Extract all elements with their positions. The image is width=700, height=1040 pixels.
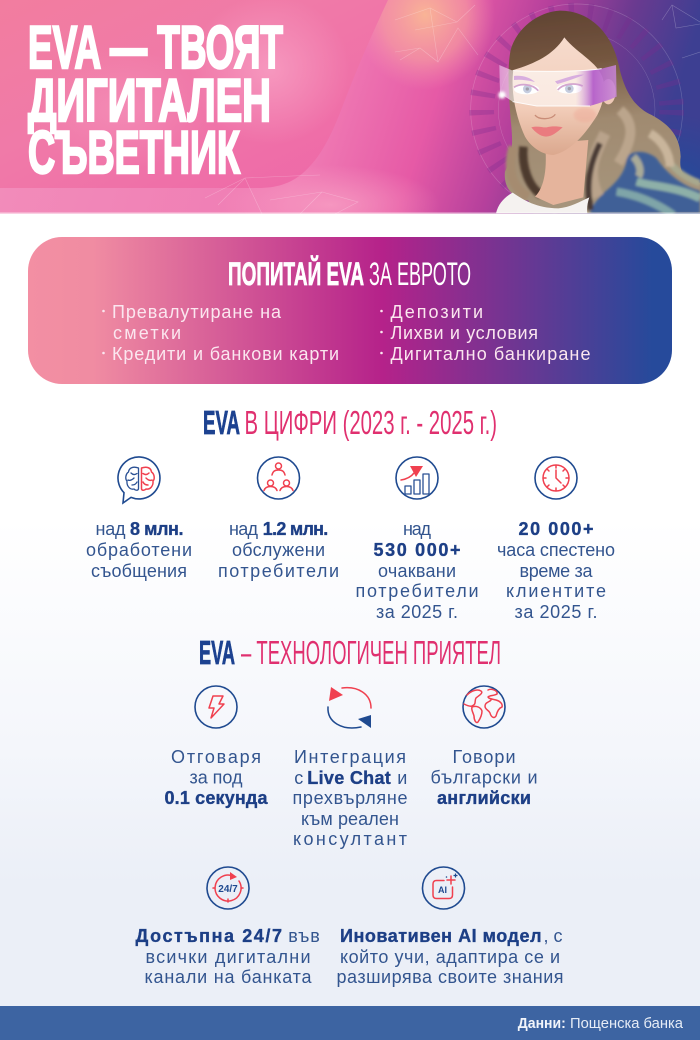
stat text (356, 519, 478, 622)
feature text (164, 747, 268, 808)
eye makeup and eyes (514, 75, 584, 94)
header title: СЪВЕТНИК (28, 119, 240, 186)
feature text: Live Chat (307, 768, 391, 788)
feature text: английски (437, 788, 531, 808)
icon: 24/7: 24/7 (218, 884, 238, 895)
stat text (218, 519, 339, 581)
lips (531, 126, 563, 137)
list: left column: Превалутиране на (112, 302, 282, 322)
list: right column: Лихви и условия (390, 323, 538, 343)
feature text: за под (190, 768, 243, 788)
icon: lightning (195, 686, 237, 728)
footer: data source: Данни: (518, 1016, 566, 1032)
feature text: , с (544, 926, 563, 946)
feature text: Отговаря (171, 747, 261, 767)
feature text (136, 926, 320, 987)
feature: live chat integration (292, 687, 408, 849)
icon: 24/7 (207, 867, 249, 909)
feature: response speed (164, 686, 268, 808)
face (513, 37, 604, 155)
stat text: потребители (356, 581, 478, 601)
feature text (336, 926, 564, 987)
header title: EVA — ТВОЯТ (28, 14, 283, 81)
list: left column: сметки (113, 323, 181, 343)
panel: ask EVA about the euro (28, 237, 672, 384)
feature: AI model (336, 867, 564, 987)
icon: AI chip (422, 867, 464, 909)
panel heading: ЗА ЕВРОТО (369, 256, 471, 292)
radial technology rings (471, 4, 683, 216)
footer: data source: Пощенска банка (570, 1016, 684, 1032)
feature: availability (136, 867, 320, 987)
header title: ДИГИТАЛЕН (28, 67, 271, 134)
feature text: към реален (301, 809, 399, 829)
stat text: 8 млн. (130, 519, 184, 539)
stat text (86, 519, 192, 581)
feature text: който учи, адаптира се и (340, 947, 560, 967)
feature text: във (288, 926, 320, 946)
stat: expected users (356, 457, 478, 622)
feature text: с (294, 768, 303, 788)
icon: brain speech bubble (118, 457, 160, 503)
feature text: Интеграция (294, 747, 406, 767)
footer: data source (0, 1006, 700, 1040)
neck and shirt (535, 140, 588, 205)
stat text: потребители (218, 561, 339, 581)
heading: EVA in numbers: В ЦИФРИ (2023 г. - 2025 г.) (244, 404, 497, 441)
portrait of EVA (496, 11, 700, 215)
ear (603, 79, 616, 104)
feature text (430, 747, 538, 808)
stat text: обработени (86, 540, 192, 560)
feature text: 0.1 секунда (164, 788, 268, 808)
stat: users served (218, 457, 339, 581)
icon: clock (535, 457, 577, 499)
heading: EVA technological friend (199, 634, 501, 671)
list: right column (380, 302, 590, 364)
heading: EVA technological friend: – ТЕХНОЛОГИЧЕН ПРИЯТЕЛ (241, 634, 501, 671)
heading: EVA in numbers (203, 404, 497, 441)
stat text: 1.2 млн. (263, 519, 328, 539)
icon: globe (463, 686, 505, 728)
stat text: обслужени (232, 540, 325, 560)
feature: languages (430, 686, 538, 808)
blue hair ends (510, 110, 700, 215)
feature text: и (397, 768, 407, 788)
stat text: 530 000+ (374, 540, 460, 560)
glass visor (498, 65, 617, 106)
stat text: очаквани (378, 561, 456, 581)
network line decoration (205, 5, 700, 214)
icon: people (258, 457, 300, 499)
feature text: български и (430, 768, 538, 788)
stat text: над (403, 519, 431, 539)
panel heading: ПОПИТАЙ EVA (228, 256, 364, 292)
header title (28, 14, 283, 186)
stat text: клиентите (506, 581, 606, 601)
icon: growth chart (396, 457, 438, 499)
stat text: часа спестено (497, 540, 615, 560)
icon: AI chip: AI (438, 885, 447, 895)
stat text (497, 519, 615, 622)
feature text: Говори (452, 747, 516, 767)
list: right column: Депозити (390, 302, 483, 322)
stat text: съобщения (91, 561, 187, 581)
heading: EVA technological friend: EVA (199, 634, 235, 671)
stat text: за 2025 г. (376, 602, 458, 622)
header banner (0, 0, 700, 214)
heading: EVA in numbers: EVA (203, 404, 240, 441)
feature text: консултант (293, 829, 407, 849)
nose (535, 114, 555, 119)
stat text: време за (520, 561, 593, 581)
feature text: всички дигитални (146, 947, 310, 967)
stat text: 20 000+ (518, 519, 594, 539)
stat text: за 2025 г. (514, 602, 598, 622)
curved title panel (0, 0, 388, 188)
list: right column: Дигитално банкиране (390, 344, 590, 364)
feature text: разширява своите знания (336, 967, 564, 987)
list: left column (102, 302, 339, 364)
stat text: над (96, 519, 126, 539)
list: left column: Кредити и банкови карти (112, 344, 339, 364)
feature text: Иновативен AI модел (340, 926, 542, 946)
feature text: Достъпна 24/7 (136, 926, 282, 946)
feature text (292, 747, 408, 849)
feature text: прехвърляне (292, 788, 408, 808)
stat: hours saved (497, 457, 615, 622)
stat: messages processed (86, 457, 192, 581)
icon: circular arrows (328, 687, 371, 728)
back hair (505, 11, 700, 213)
stat text: над (229, 519, 258, 539)
feature text: канали на банката (144, 967, 312, 987)
